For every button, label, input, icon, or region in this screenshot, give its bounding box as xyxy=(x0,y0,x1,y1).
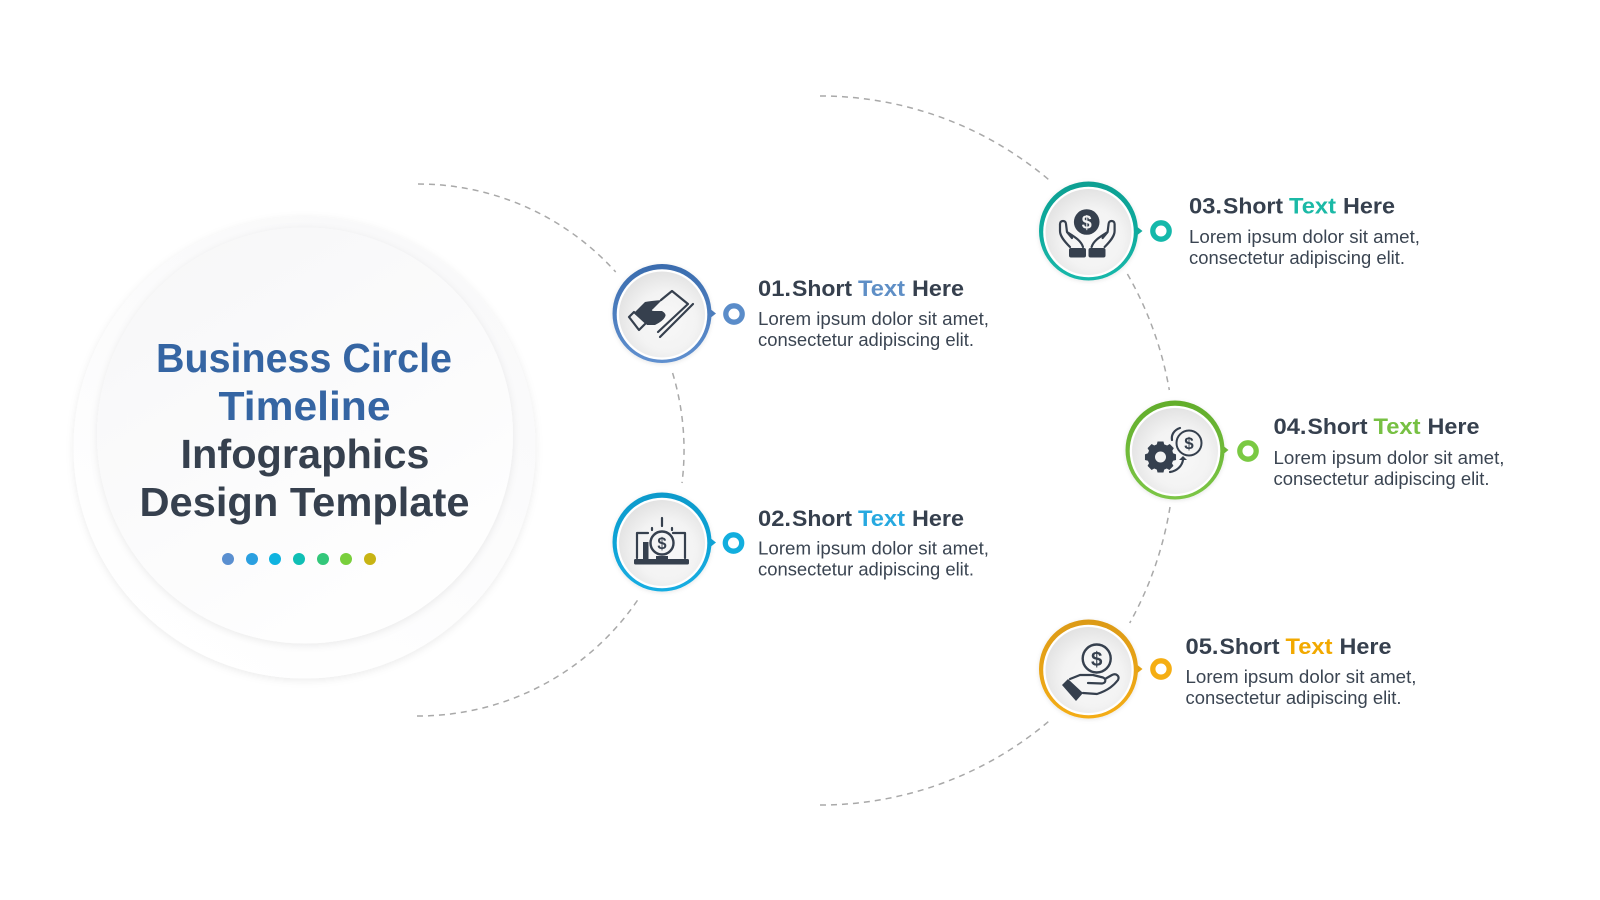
heading 05 xyxy=(1186,634,1392,659)
description 02: consectetur adipiscing elit. xyxy=(758,558,974,580)
heading 04: Here xyxy=(1428,414,1480,439)
heading 02: Text xyxy=(858,506,906,531)
node 03 xyxy=(1039,182,1420,280)
heading 04: Text xyxy=(1374,414,1421,439)
heading 02: Short xyxy=(792,506,853,531)
heading 01: Short xyxy=(792,276,853,301)
heading 02 xyxy=(758,506,964,531)
title: Business Circle xyxy=(156,335,452,381)
node ring 04 xyxy=(1126,400,1228,500)
description 01: Lorem ipsum dolor sit amet, xyxy=(758,308,989,329)
title: Timeline xyxy=(218,383,390,429)
description 02 xyxy=(758,538,989,580)
icon: hand with coin: $ xyxy=(1091,648,1103,671)
heading 04: Short xyxy=(1308,414,1368,439)
description 04: consectetur adipiscing elit. xyxy=(1274,468,1490,489)
heading 05: Here xyxy=(1340,634,1392,659)
decorative colour dots xyxy=(222,553,376,565)
icon: laptop with coin: $ xyxy=(657,535,667,553)
node ring 01 xyxy=(612,264,716,363)
connector ring 04 xyxy=(1240,443,1256,459)
connector ring 05 xyxy=(1153,661,1169,677)
description 03 xyxy=(1189,226,1420,268)
heading 04 xyxy=(1274,414,1480,439)
description 04: Lorem ipsum dolor sit amet, xyxy=(1274,447,1504,468)
heading 05: 05. xyxy=(1186,634,1218,659)
heading 03: Text xyxy=(1289,194,1337,218)
heading 05: Text xyxy=(1286,634,1333,659)
connector ring 01 xyxy=(726,306,742,322)
icon: hands holding coin: $ xyxy=(1082,212,1092,232)
node 05 xyxy=(1039,620,1416,718)
heading 03 xyxy=(1189,194,1395,218)
node 04 xyxy=(1126,400,1504,500)
heading 03: Here xyxy=(1343,194,1395,218)
description 01 xyxy=(758,308,989,350)
panel: central title circle xyxy=(74,216,536,678)
icon: gear and coin: $ xyxy=(1184,434,1194,453)
node ring 05 xyxy=(1039,620,1142,718)
icon: gear and coin xyxy=(1145,428,1202,473)
description 03: Lorem ipsum dolor sit amet, xyxy=(1189,226,1420,247)
node 01 xyxy=(612,264,989,363)
heading 03: Short xyxy=(1223,194,1284,218)
description 01: consectetur adipiscing elit. xyxy=(758,329,974,350)
icon: laptop with coin xyxy=(634,518,689,564)
description 04 xyxy=(1274,447,1504,489)
title xyxy=(140,335,470,525)
heading 02: Here xyxy=(912,506,964,531)
icon: hand with coin xyxy=(1062,644,1119,701)
heading 02: 02. xyxy=(758,506,791,531)
node ring 03 xyxy=(1039,182,1142,280)
dashed arc: right xyxy=(820,96,1170,805)
description 02: Lorem ipsum dolor sit amet, xyxy=(758,538,989,558)
description 05: Lorem ipsum dolor sit amet, xyxy=(1186,666,1416,687)
heading 01: Text xyxy=(858,276,906,301)
description 05: consectetur adipiscing elit. xyxy=(1186,687,1402,708)
heading 04: 04. xyxy=(1274,414,1306,439)
heading 03: 03. xyxy=(1189,194,1222,218)
title: Infographics xyxy=(180,431,430,477)
icon: hand with banknote xyxy=(629,291,693,337)
dashed arc: left xyxy=(417,184,684,716)
description 05 xyxy=(1186,666,1416,708)
node 02 xyxy=(612,492,989,592)
icon: hands holding coin xyxy=(1060,209,1115,258)
description 03: consectetur adipiscing elit. xyxy=(1189,247,1405,268)
connector ring 03 xyxy=(1153,223,1169,239)
heading 01: 01. xyxy=(758,276,791,301)
heading 01 xyxy=(758,276,964,301)
heading 01: Here xyxy=(912,276,964,301)
title: Design Template xyxy=(140,479,470,525)
connector ring 02 xyxy=(725,535,742,551)
heading 05: Short xyxy=(1220,634,1280,659)
node ring 02 xyxy=(612,492,716,592)
